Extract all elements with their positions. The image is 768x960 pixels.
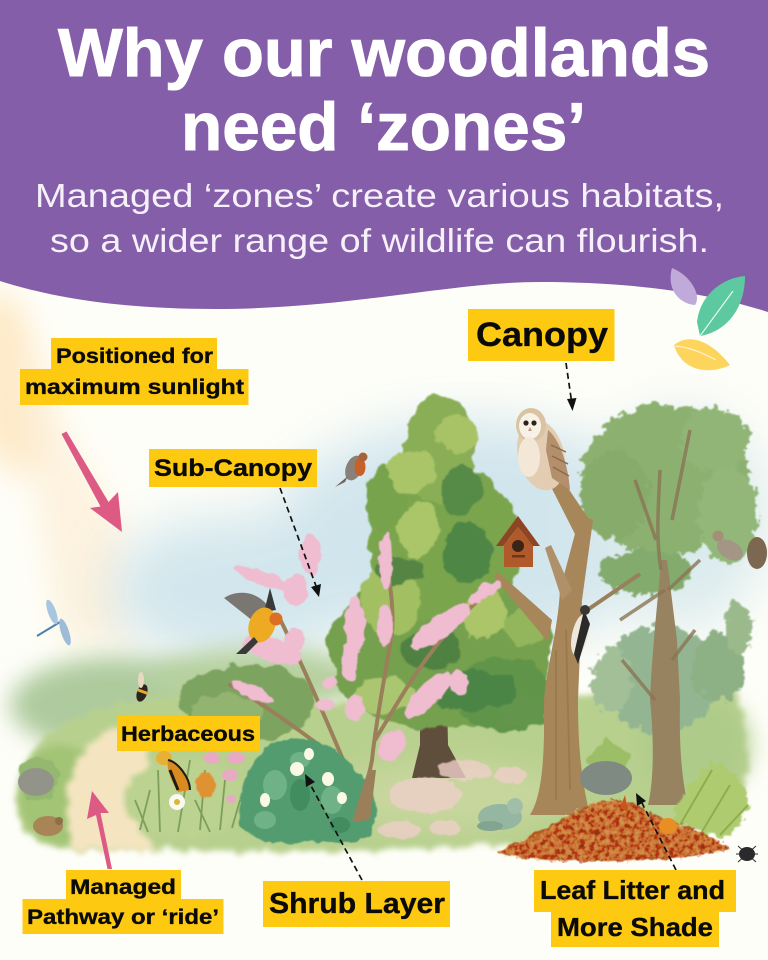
trunk and limbs [648,560,688,805]
label: shrub layer [263,881,450,927]
label: canopy [468,309,614,361]
subtitle: so a wider range of wildlife can flourish. [50,222,709,259]
label: leaf litter and more shade: More Shade [557,912,713,942]
mouse [33,816,63,836]
blossoms [229,532,505,766]
robin [335,452,368,487]
subtitle: Managed ‘zones’ create various habitats, [35,177,724,214]
sub-canopy pointer [280,488,321,597]
label: shrub layer: Shrub Layer [269,888,445,920]
subtitle [35,177,724,259]
leaf litter pointer [636,793,676,870]
squirrel [712,530,767,569]
foliage [581,404,758,734]
label: leaf litter and more shade: Leaf Litter and [540,875,725,905]
cherry sub-canopy tree [229,532,505,820]
shrub pointer [305,774,362,880]
label: leaf litter and more shade [534,870,736,947]
label: managed pathway: Pathway or ‘ride’ [27,906,219,929]
trunk [412,700,466,778]
back right tree [581,404,758,805]
canopy pointer [566,363,576,411]
label: managed pathway [22,870,224,934]
label: positioned for maximum sunlight [20,338,248,405]
fern [672,760,750,838]
label: herbaceous: Herbaceous [121,723,255,746]
decorative leaves [671,268,745,370]
pathway arrow [87,791,112,869]
fallen petals [378,760,528,839]
foliage [328,395,553,733]
beetle [736,846,758,862]
leaf litter pile [498,795,730,861]
large mid tree [328,395,553,778]
owl tree trunk [494,470,640,815]
bee [134,672,150,703]
meadow ground [10,648,750,852]
sunlight glow [0,290,130,650]
label: positioned for maximum sunlight: maximum sunlight [25,375,244,399]
herbaceous plants [125,751,245,838]
sky wash [110,410,768,665]
label: positioned for maximum sunlight: Positioned for [56,344,214,368]
sunlight arrow [62,432,122,532]
title [58,15,710,165]
label: managed pathway: Managed [70,876,176,899]
shrub layer bush [239,738,376,843]
purple header band [0,0,768,312]
left rock [18,757,60,800]
birdhouse [496,516,540,567]
woodpecker [568,605,592,664]
cherry tree base trunk [352,770,376,822]
colourful bird [224,588,282,654]
pathway [67,722,160,850]
low left hedge [180,664,316,740]
frog [477,798,523,831]
label: canopy: Canopy [476,316,608,354]
dragonfly [37,598,73,647]
label: sub-canopy [149,449,317,487]
label: sub-canopy: Sub-Canopy [154,455,313,482]
rock and fern plant [580,738,632,795]
owl [510,408,572,495]
label: herbaceous [117,716,260,751]
butterfly [168,760,190,792]
title: need ‘zones’ [181,89,586,165]
title: Why our woodlands [58,15,710,91]
